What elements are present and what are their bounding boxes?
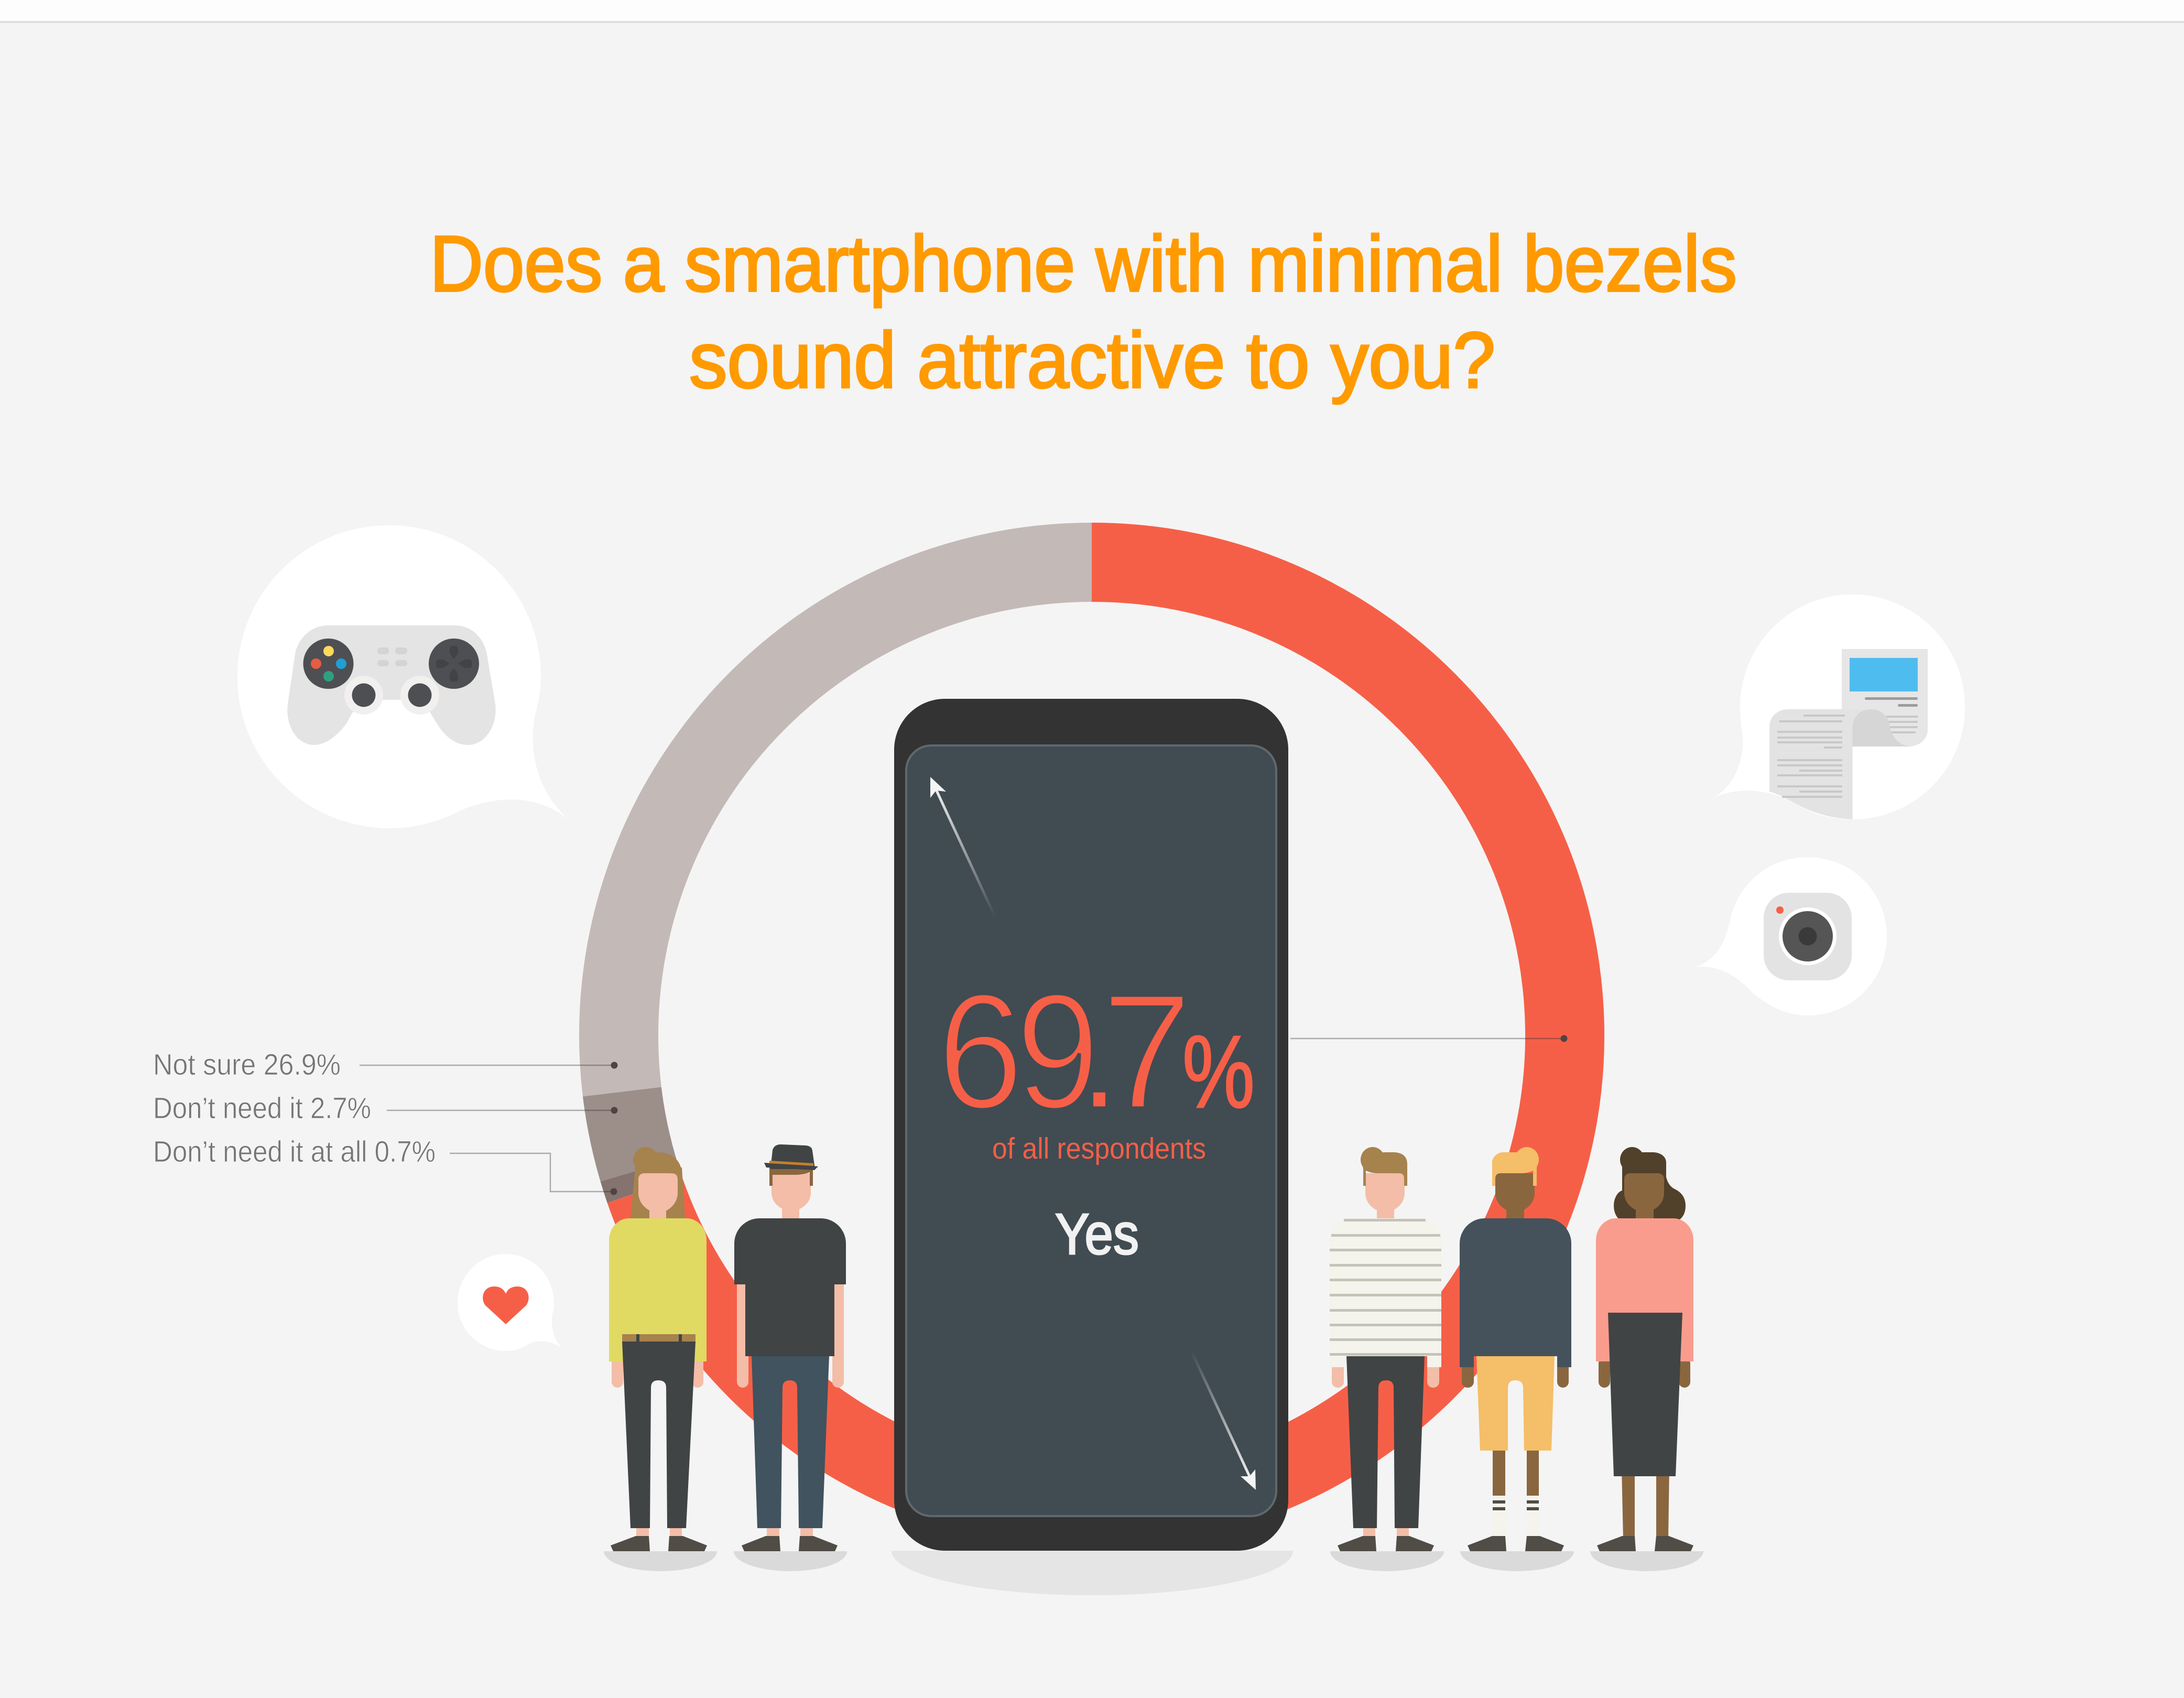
arrow: bottom right xyxy=(1191,1351,1256,1490)
smartphone xyxy=(894,699,1288,1551)
phone screen xyxy=(906,745,1276,1516)
person: man in striped sweater xyxy=(1330,1147,1444,1571)
percentage value xyxy=(937,959,1192,1143)
icon: game controller xyxy=(287,625,496,745)
legend labels: Don’t need it at all 0.7% xyxy=(153,1135,436,1169)
percentage value: . xyxy=(1077,959,1122,1143)
leader lines with dots xyxy=(360,1035,1567,1195)
answer: Yes: Yes xyxy=(1055,1202,1139,1267)
percentage value: 6 xyxy=(937,959,1024,1143)
segment: don't need it 2.7% xyxy=(622,1091,638,1170)
legend labels: Don’t need it 2.7% xyxy=(153,1091,371,1125)
segment: don't need it at all 0.7% xyxy=(638,1170,645,1190)
percent sign: % xyxy=(1182,1014,1255,1129)
icon: rolled newspaper xyxy=(1769,649,1928,819)
segment: yes 69.7% xyxy=(645,562,1565,1509)
title: Does a smartphone with minimal bezels xyxy=(430,219,1737,308)
segment: not sure 26.9% xyxy=(618,562,1092,1091)
percentage value: 9 xyxy=(1016,959,1100,1143)
person: man with hat xyxy=(734,1144,847,1571)
speech bubble: game controller xyxy=(237,525,570,828)
person: woman in pink sweater and skirt xyxy=(1590,1147,1703,1571)
percentage value: 7 xyxy=(1101,959,1192,1143)
title xyxy=(430,219,1737,404)
legend labels xyxy=(153,1048,436,1169)
icon: heart xyxy=(483,1286,529,1324)
speech bubble: camera xyxy=(1694,857,1887,1015)
speech bubble: news article xyxy=(1707,594,1965,819)
speech bubble: heart xyxy=(458,1254,562,1351)
person: man in navy sweater and shorts xyxy=(1460,1147,1574,1571)
caption: of all respondents: of all respondents xyxy=(992,1132,1206,1165)
person: woman in yellow sweater xyxy=(604,1147,717,1571)
legend labels: Not sure 26.9% xyxy=(153,1048,341,1081)
phone shadow xyxy=(892,1551,1293,1595)
donut chart xyxy=(618,562,1565,1509)
title: sound attractive to you? xyxy=(689,316,1495,404)
arrow: top left xyxy=(930,777,995,917)
icon: camera xyxy=(1764,893,1852,980)
